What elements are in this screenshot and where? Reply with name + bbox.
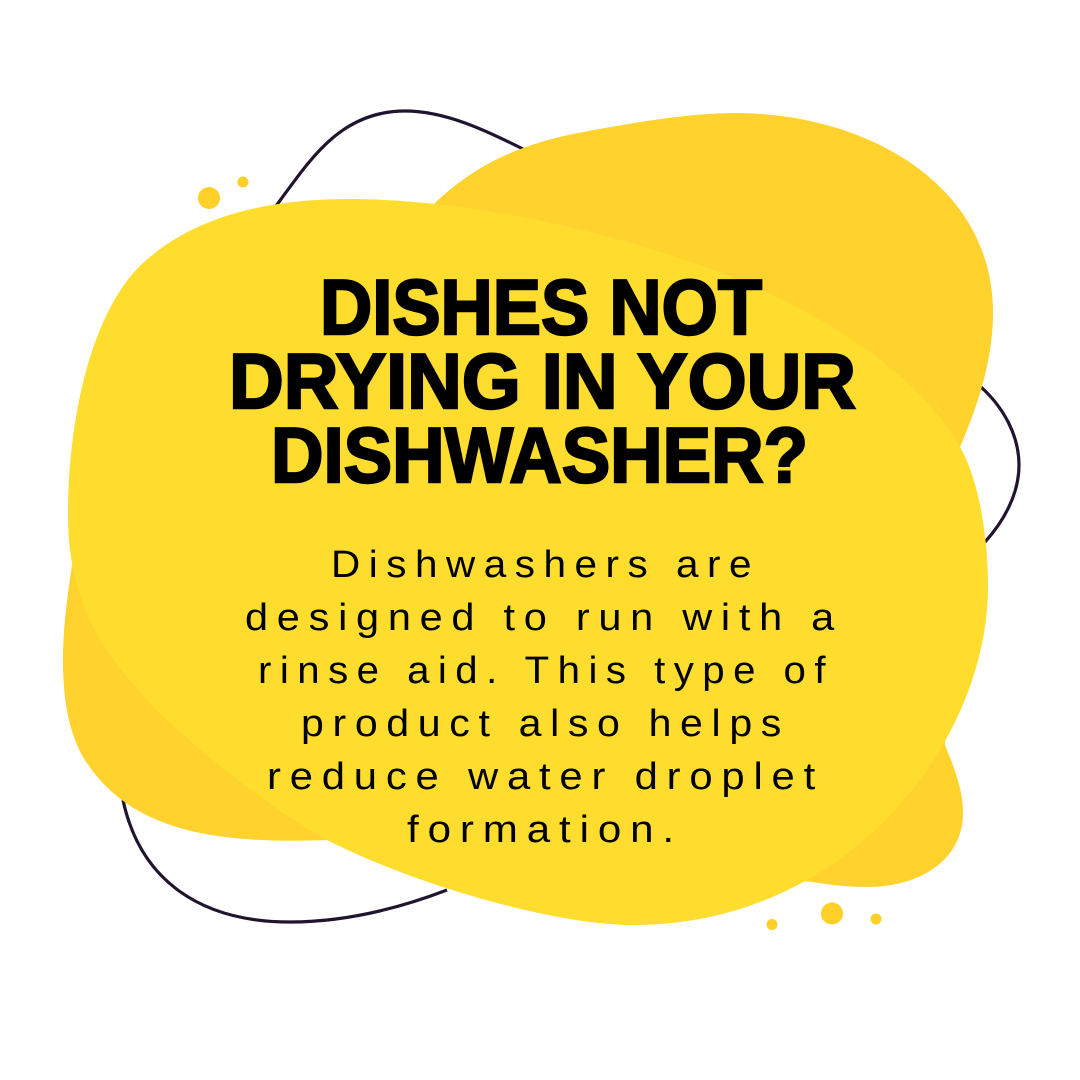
body text: reduce water droplet	[267, 756, 824, 798]
front blob	[68, 199, 988, 925]
body text: Dishwashers are	[331, 544, 760, 586]
title: DISHES NOT	[320, 263, 762, 351]
decorative dots bottom	[766, 902, 882, 930]
body text	[245, 544, 843, 851]
title	[229, 263, 856, 499]
back blob	[63, 113, 993, 887]
body text: formation.	[407, 809, 683, 851]
outline blob	[123, 111, 1019, 922]
body text: product also helps	[301, 703, 790, 745]
title: DRYING IN YOUR	[229, 337, 856, 425]
body text: designed to run with a	[245, 597, 843, 639]
decorative dots top	[198, 176, 248, 209]
body text: rinse aid. This type of	[258, 650, 834, 692]
title: DISHWASHER?	[271, 411, 808, 499]
